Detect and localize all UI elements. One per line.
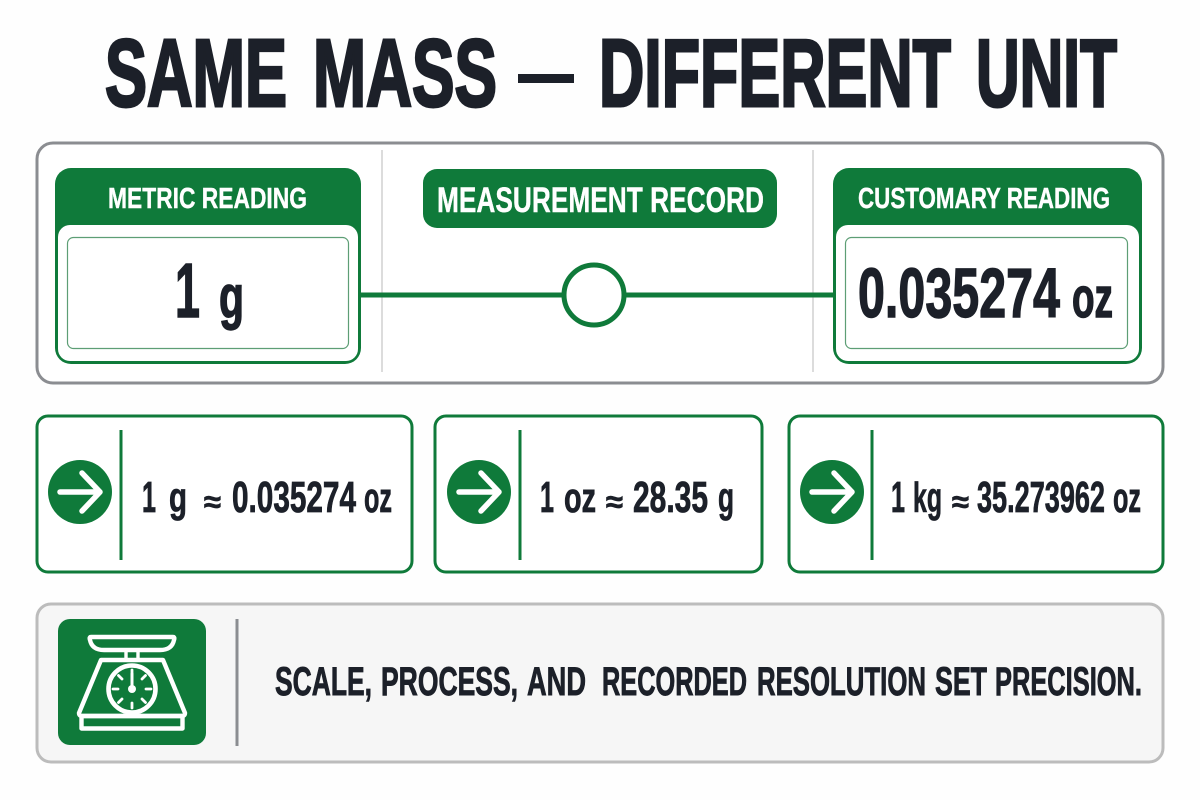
title: MASS	[313, 20, 497, 127]
customary reading card	[833, 168, 1142, 364]
conversion text	[142, 473, 392, 522]
icon: arrow	[447, 460, 511, 524]
conversion text	[891, 473, 1141, 522]
conversion text	[540, 473, 734, 522]
precision statement: RECORDED	[602, 660, 747, 704]
conversion text: oz	[564, 474, 596, 521]
connector node	[564, 265, 624, 325]
panel: measurement comparison	[37, 143, 1163, 383]
precision statement: SCALE,	[275, 660, 372, 704]
conversion text: 1	[891, 473, 905, 522]
record label: MEASUREMENT RECORD	[437, 181, 764, 220]
conversion text: ≈	[952, 486, 969, 519]
customary reading card: CUSTOMARY READING	[858, 183, 1110, 215]
customary reading card: oz	[1072, 266, 1113, 330]
title: SAME	[105, 20, 287, 127]
precision statement: AND	[527, 660, 586, 704]
conversion text: g	[169, 474, 187, 521]
conversion text: 28.35	[633, 473, 708, 522]
precision statement: RESOLUTION	[757, 660, 926, 704]
conversion text: g	[718, 474, 734, 521]
icon: arrow	[800, 460, 864, 524]
conversion text: ≈	[606, 486, 623, 519]
title: UNIT	[976, 20, 1117, 127]
panel: precision note	[37, 604, 1163, 762]
customary reading card: 0.035274	[858, 254, 1060, 332]
conversion text: 35.273962	[977, 473, 1105, 522]
conversion text: 1	[142, 473, 156, 522]
precision statement: PROCESS,	[381, 660, 518, 704]
conversion text: 0.035274	[232, 473, 356, 522]
conversion text: ≈	[204, 486, 221, 519]
conversion text: 1	[540, 473, 554, 522]
conversion text: kg	[913, 474, 942, 521]
metric reading card: 1	[175, 248, 200, 334]
conversion card: ounce to gram	[435, 416, 762, 572]
title	[105, 20, 1117, 127]
conversion card: kilogram to ounce	[789, 416, 1163, 572]
metric reading card	[55, 168, 361, 364]
title: DIFFERENT	[599, 20, 951, 127]
precision statement: SET	[935, 660, 987, 704]
record label	[423, 169, 777, 228]
conversion text: oz	[364, 474, 392, 521]
precision statement	[275, 660, 1142, 704]
icon: arrow	[48, 460, 112, 524]
conversion text: oz	[1113, 474, 1141, 521]
conversion card: gram to ounce	[37, 416, 412, 572]
metric reading card: METRIC READING	[108, 183, 307, 215]
connector line	[359, 292, 835, 298]
icon: kitchen scale	[58, 619, 206, 745]
metric reading card: g	[219, 263, 244, 330]
